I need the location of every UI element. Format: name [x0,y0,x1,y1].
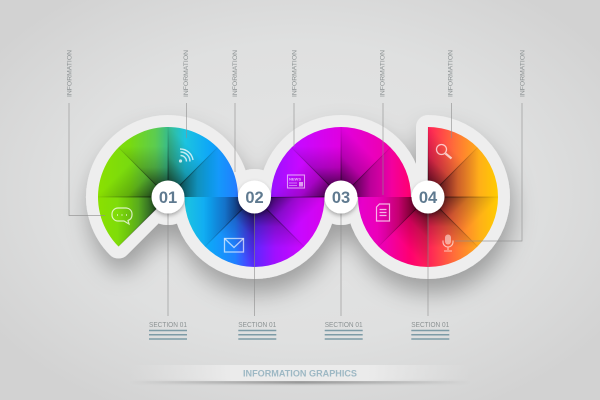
section 04 caption: SECTION 01 [411,322,449,329]
title band: INFORMATION GRAPHICS [243,368,357,380]
vertical labels: INFORMATION [232,50,239,97]
vertical labels: INFORMATION [519,50,526,97]
disc 01 [84,113,252,247]
hub 02 [238,180,271,214]
hub 03: 03 [332,189,350,207]
vertical labels: INFORMATION [380,50,386,97]
icon: envelope [224,238,244,252]
icon: newspaper [288,175,304,188]
vertical labels: INFORMATION [66,50,73,97]
disc 02 [170,162,324,281]
hub 03 [324,180,358,214]
section 02 caption [238,322,276,339]
vertical labels [66,50,526,97]
section 02 caption: SECTION 01 [238,322,276,329]
hub 01: 01 [159,189,177,207]
vertical labels: INFORMATION [448,50,454,97]
vertical labels: INFORMATION [291,50,298,97]
section 01 caption [149,322,187,339]
hub 04 [412,180,444,214]
icon: wifi [179,149,193,163]
section 01 caption: SECTION 01 [149,322,187,329]
leader lines [69,103,522,316]
section 03 caption: SECTION 01 [325,322,363,329]
icon: newspaper: NEWS [289,176,301,182]
hub 02: 02 [245,189,264,207]
icon: magnifier [436,144,452,158]
icon: chat bubble [112,208,132,224]
icon: document [376,204,390,221]
section 03 caption [325,322,363,339]
leader line behind ribbon [234,103,236,172]
disc 03 [271,113,425,232]
vertical labels: INFORMATION [183,50,190,97]
icon: microphone [443,234,453,251]
hub 04: 04 [419,189,438,207]
section 04 caption [411,322,449,339]
coloured ribbon [84,113,512,281]
disc 04 [344,127,512,281]
title band [130,365,470,384]
white border of ribbon [98,127,498,267]
hub 01 [152,180,184,214]
